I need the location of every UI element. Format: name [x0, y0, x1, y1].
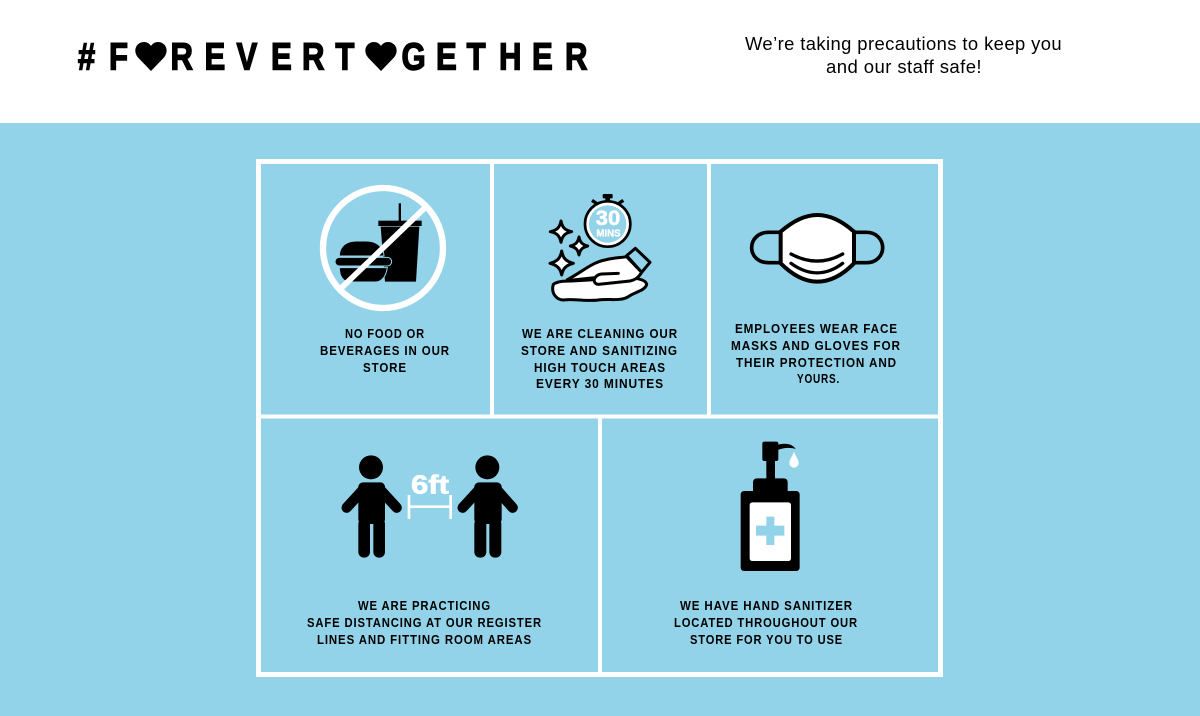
caption: sanitizer: WE HAVE HAND SANITIZER: [680, 598, 853, 613]
caption: sanitizer: LOCATED THROUGHOUT OUR: [674, 615, 858, 630]
distance bracket: [409, 495, 451, 519]
caption: no food: STORE: [363, 360, 407, 375]
caption: masks: EMPLOYEES WEAR FACE: [735, 321, 898, 336]
caption: distancing: SAFE DISTANCING AT OUR REGISTER: [307, 615, 542, 630]
caption: masks: YOURS.: [797, 371, 840, 386]
icon: cleaning with 30 minute timer: MINS: [596, 228, 621, 239]
caption: cleaning: EVERY 30 MINUTES: [536, 376, 664, 391]
caption: distancing: LINES AND FITTING ROOM AREAS: [317, 632, 532, 647]
icon: cleaning with 30 minute timer: 30: [596, 206, 620, 230]
caption: cleaning: WE ARE CLEANING OUR: [522, 326, 678, 341]
caption: no food: [320, 326, 450, 375]
title: hashtag logo: E: [205, 37, 225, 78]
title: hashtag logo: R: [171, 37, 193, 78]
title: hashtag logo: G: [401, 37, 426, 78]
person right: [463, 455, 513, 558]
icon: hand sanitizer pump bottle: [741, 442, 800, 571]
caption: sanitizer: STORE FOR YOU TO USE: [690, 632, 843, 647]
title: hashtag logo: V: [236, 37, 257, 78]
caption: sanitizer: [674, 598, 858, 647]
icon: cleaning with 30 minute timer: [550, 194, 650, 300]
caption: no food: BEVERAGES IN OUR: [320, 343, 450, 358]
caption: masks: MASKS AND GLOVES FOR: [731, 338, 901, 353]
icon: no food or drink: [323, 188, 443, 308]
title: hashtag logo: R: [302, 37, 325, 78]
title: hashtag logo: #: [78, 37, 95, 78]
tagline: and our staff safe!: [826, 57, 982, 77]
title: hashtag logo: F: [109, 37, 128, 78]
caption: no food: NO FOOD OR: [345, 326, 425, 341]
title: hashtag logo: E: [532, 37, 553, 78]
caption: cleaning: STORE AND SANITIZING: [521, 343, 678, 358]
person left: [347, 455, 397, 558]
title: hashtag logo: R: [565, 37, 587, 78]
caption: cleaning: [521, 326, 678, 391]
title: hashtag logo: E: [271, 37, 292, 78]
tagline: We’re taking precautions to keep you: [745, 34, 1062, 54]
title: hashtag logo: [78, 37, 587, 78]
caption: masks: [731, 321, 901, 386]
icon: two people six feet apart: [347, 455, 513, 558]
title: hashtag logo: T: [467, 37, 486, 78]
caption: distancing: [307, 598, 542, 647]
caption: cleaning: HIGH TOUCH AREAS: [534, 360, 666, 375]
title: hashtag logo: H: [499, 37, 521, 78]
distance label: 6ft: [411, 469, 449, 499]
icon: face mask: [752, 215, 883, 282]
grid frame: [256, 159, 943, 677]
tagline: [745, 34, 1062, 77]
caption: distancing: WE ARE PRACTICING: [358, 598, 491, 613]
title: hashtag logo: T: [335, 37, 354, 78]
header band: [0, 0, 1200, 123]
caption: masks: THEIR PROTECTION AND: [736, 355, 897, 370]
title: hashtag logo: E: [436, 37, 457, 78]
